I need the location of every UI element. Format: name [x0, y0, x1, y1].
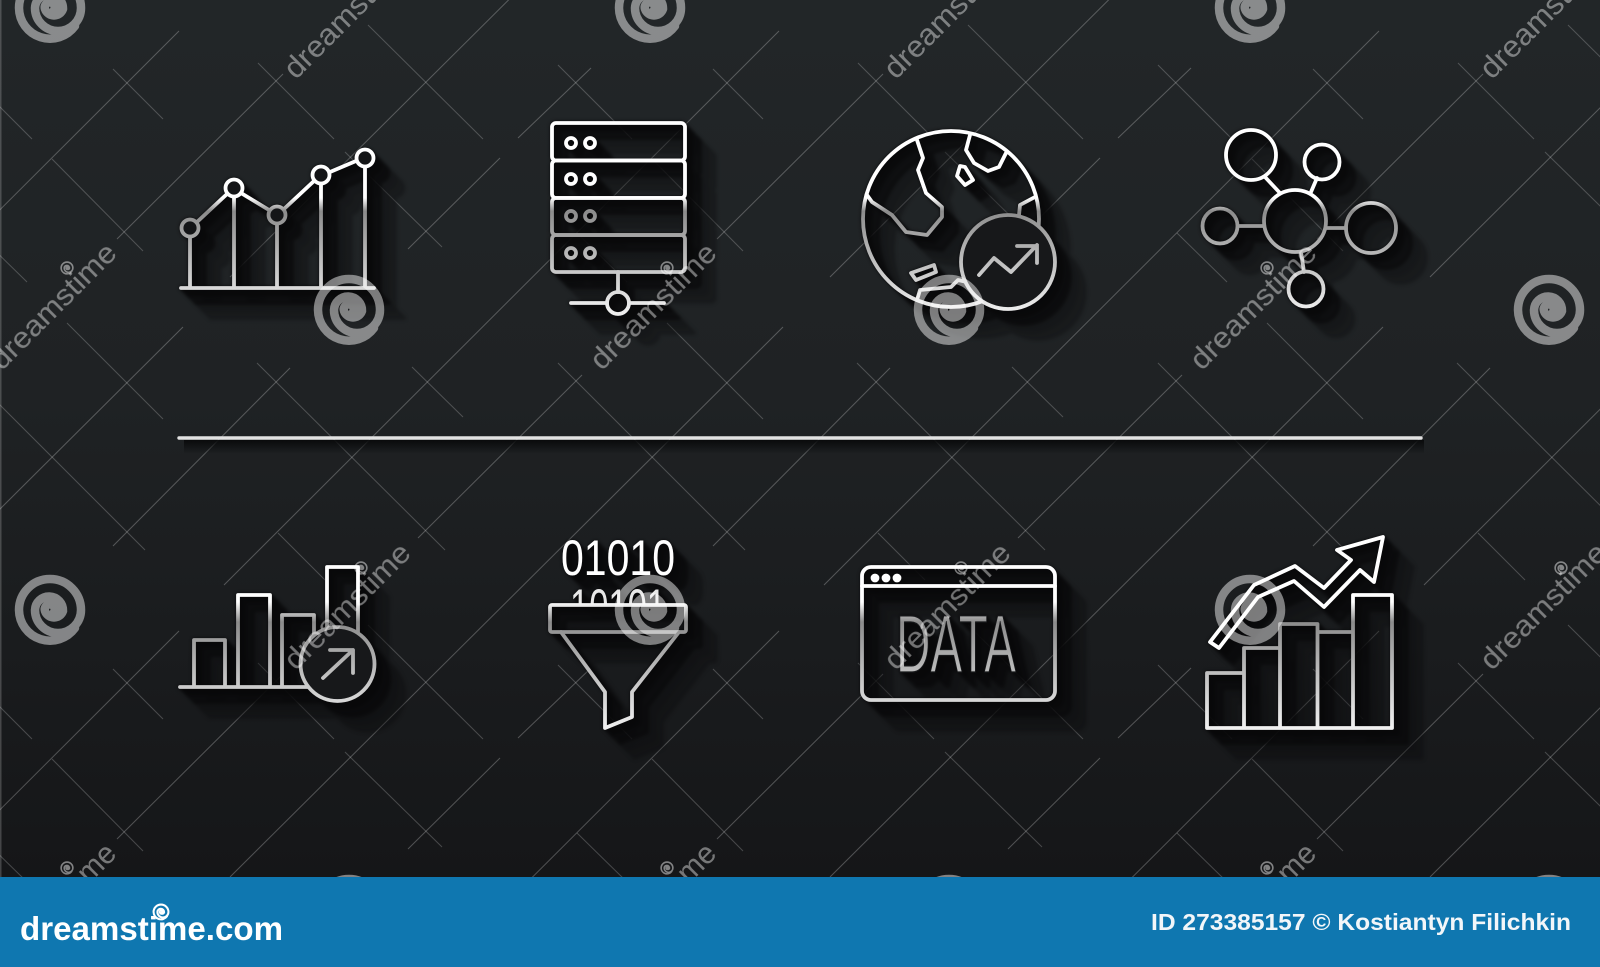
watermark text: me	[70, 837, 123, 890]
footer credit: ID 273385157 © Kostiantyn Filichkin	[1151, 909, 1571, 935]
watermark text: dreamstime	[277, 536, 417, 676]
watermark text: dreamstime	[877, 536, 1017, 676]
icon: line chart	[181, 150, 374, 288]
icon: binary data funnel: 01010	[561, 530, 675, 586]
icon: network hub	[1202, 130, 1396, 306]
footer logo: dreamstime.com	[20, 910, 283, 947]
icon: binary data funnel: 10101	[570, 579, 666, 635]
watermark text: me	[670, 837, 723, 890]
horizontal divider	[179, 438, 1424, 454]
icon: browser window with DATA: DATA	[896, 599, 1016, 690]
icon: browser window with DATA	[862, 567, 1055, 700]
footer bar	[0, 877, 1600, 967]
icon: server rack	[552, 123, 685, 314]
icon: rising bars with growth arrow	[1207, 537, 1392, 728]
icon: globe with growth arrow	[863, 131, 1055, 309]
watermark text: dreamstime	[583, 236, 723, 376]
watermark text: me	[1270, 837, 1323, 890]
watermark text: dreamstime	[1183, 236, 1323, 376]
icon: binary data funnel	[550, 530, 686, 728]
icon: bars with arrow badge	[180, 567, 374, 701]
